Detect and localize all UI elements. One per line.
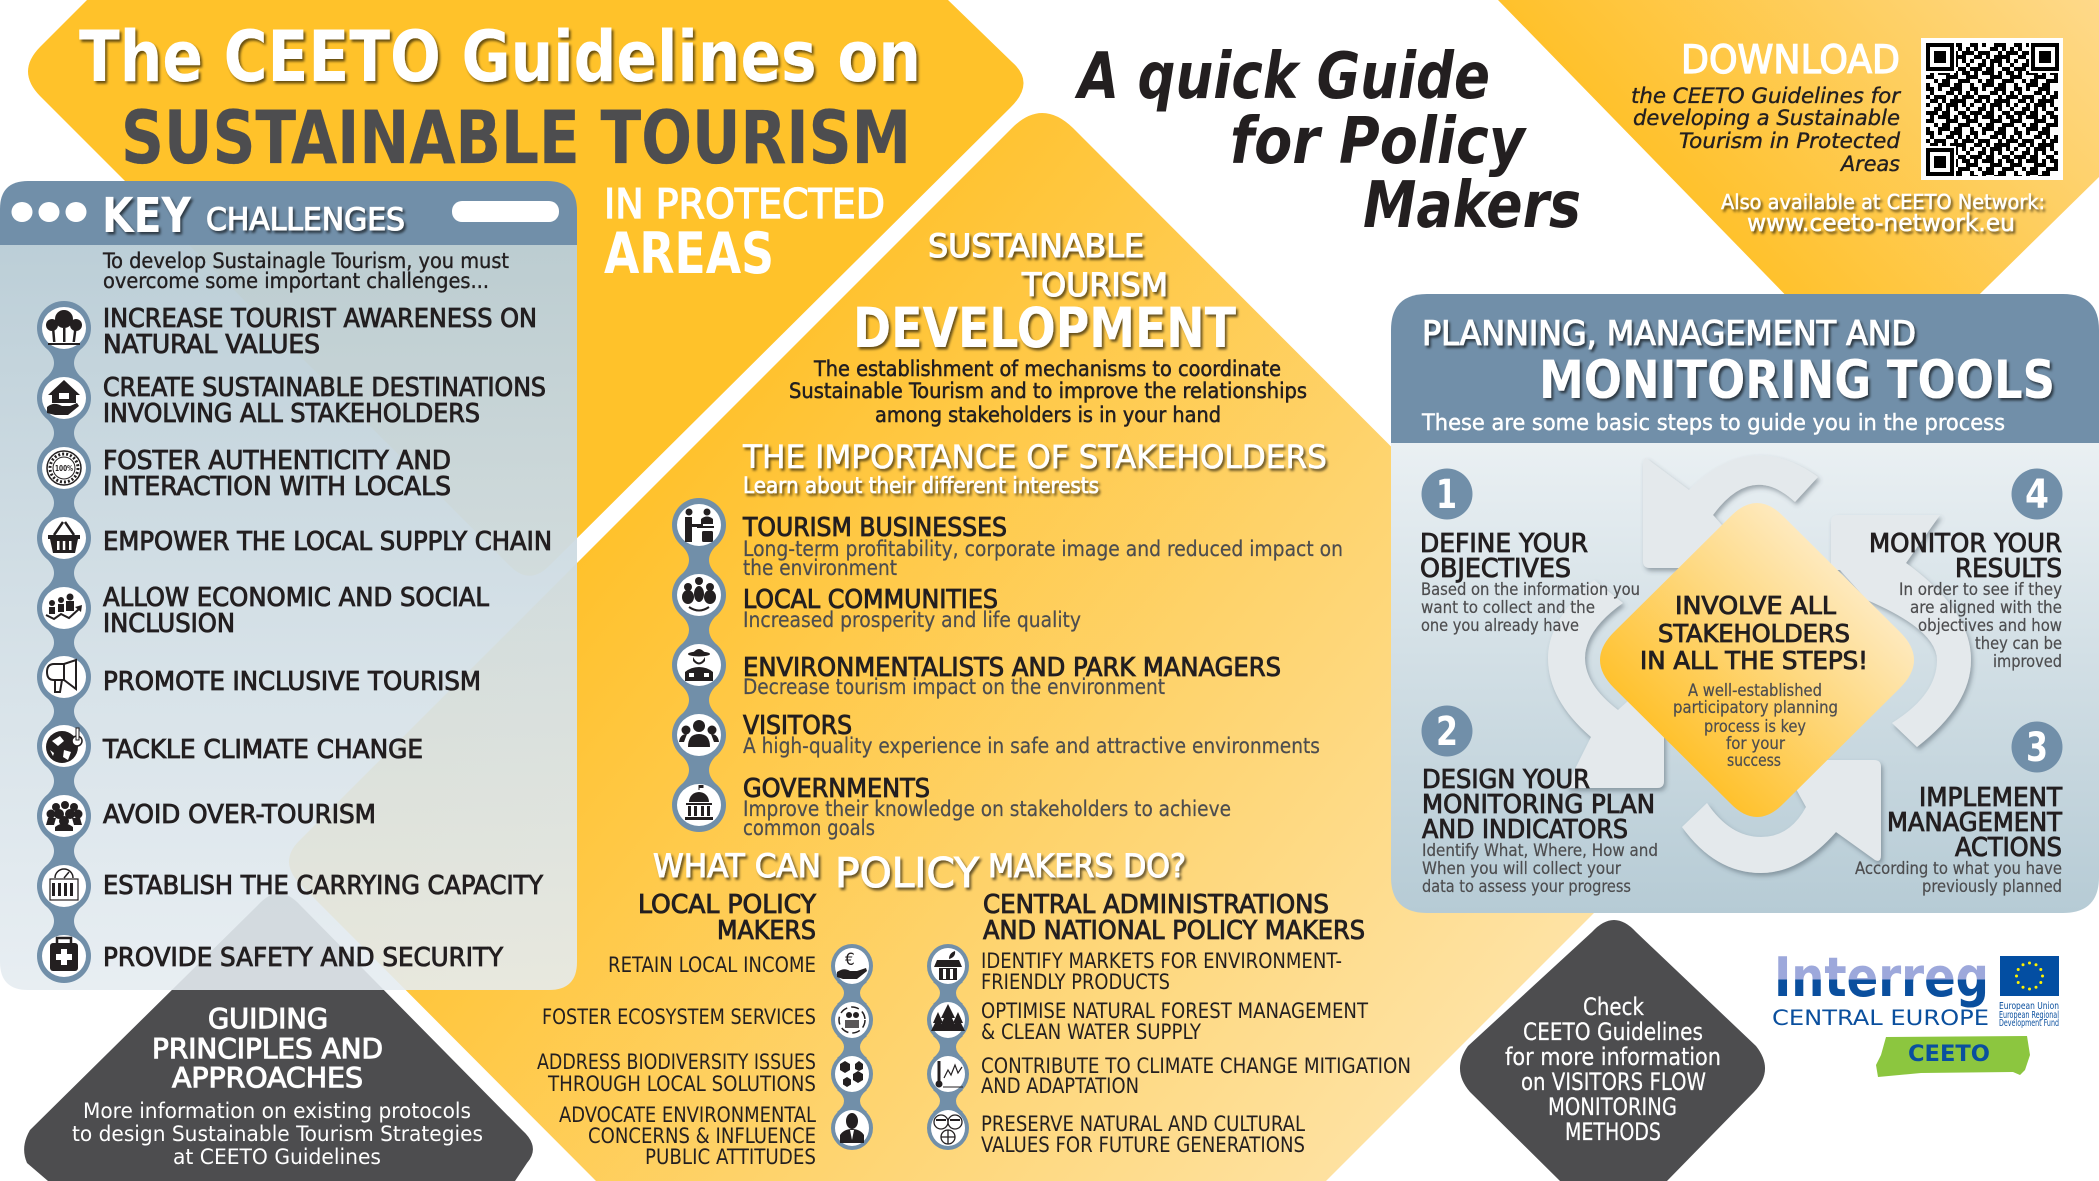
central diamond text: participatory planning xyxy=(1673,698,1838,718)
guiding principles text: APPROACHES xyxy=(172,1061,363,1094)
stakeholder: local communities xyxy=(743,585,1081,632)
check guidelines text: Check xyxy=(1583,993,1644,1021)
step 3: 3 xyxy=(2026,725,2048,771)
development description xyxy=(789,357,1307,427)
download description: the CEETO Guidelines for xyxy=(1631,84,1901,108)
title: The CEETO Guidelines on xyxy=(79,16,921,98)
step 1: want to collect and the xyxy=(1421,598,1595,618)
CEETO brush label xyxy=(1876,1036,2030,1077)
panel: check guidelines diamond background xyxy=(1460,920,1765,1181)
QR code xyxy=(1921,38,2063,180)
stakeholder: tourism businesses xyxy=(742,513,1343,580)
key challenges header xyxy=(0,181,577,245)
panel: download background xyxy=(1498,0,2099,392)
title xyxy=(79,16,921,287)
what can policy makers do heading xyxy=(653,847,1186,897)
local policy makers actions: ADVOCATE ENVIRONMENTAL xyxy=(559,1103,816,1127)
step 3: According to what you have xyxy=(1855,859,2062,879)
guiding principles text: GUIDING xyxy=(208,1002,328,1035)
central diamond text: for your xyxy=(1726,734,1786,754)
download block xyxy=(1631,38,2045,237)
central diamond text xyxy=(1673,681,1838,771)
EU flag xyxy=(2000,956,2059,996)
challenges list: FOSTER AUTHENTICITY AND xyxy=(103,446,451,476)
stakeholder: governments: GOVERNMENTS xyxy=(743,774,930,804)
development description: among stakeholders is in your hand xyxy=(875,403,1221,427)
step 2: DESIGN YOUR xyxy=(1422,765,1590,795)
planning panel header xyxy=(1391,294,2099,443)
key challenges header: KEY xyxy=(102,188,192,244)
local policy makers actions: ADDRESS BIODIVERSITY ISSUES xyxy=(537,1050,816,1074)
local policy makers actions xyxy=(537,953,816,1169)
central administrations actions: & CLEAN WATER SUPPLY xyxy=(981,1020,1201,1044)
local policy makers actions: RETAIN LOCAL INCOME xyxy=(608,953,816,977)
panel: key challenges xyxy=(0,181,577,990)
step 3 xyxy=(1855,722,2063,897)
icon: authenticity stamp xyxy=(47,451,81,485)
download description xyxy=(1631,84,1901,176)
local policy makers actions: PUBLIC ATTITUDES xyxy=(645,1145,816,1169)
icon: shopping basket xyxy=(48,522,80,553)
stakeholder: local communities: Increased prosperity and life quality xyxy=(743,608,1081,632)
challenges list: PROMOTE INCLUSIVE TOURISM xyxy=(103,667,481,697)
challenges list: NATURAL VALUES xyxy=(103,330,320,360)
key challenges intro: To develop Sustainagle Tourism, you must xyxy=(102,249,509,273)
check guidelines text: for more information xyxy=(1505,1043,1721,1071)
policy icon chains xyxy=(831,944,969,1150)
check guidelines text: on VISITORS FLOW xyxy=(1521,1068,1706,1096)
local policy makers heading: LOCAL POLICY xyxy=(638,890,817,920)
development heading: TOURISM xyxy=(1021,266,1168,304)
central administrations heading: AND NATIONAL POLICY MAKERS xyxy=(983,916,1365,946)
icon: people with rising arrow xyxy=(46,594,82,619)
development description: Sustainable Tourism and to improve the relationships xyxy=(789,379,1307,403)
icon: tourism businesses xyxy=(685,508,714,542)
challenges list: INCLUSION xyxy=(103,609,235,639)
challenges list: INCREASE TOURIST AWARENESS ON xyxy=(103,304,537,334)
development heading: DEVELOPMENT xyxy=(853,296,1236,360)
step 3: ACTIONS xyxy=(1955,833,2062,863)
stakeholder: visitors: A high-quality experience in safe and attractive environments xyxy=(743,734,1320,758)
step 1 xyxy=(1420,468,1640,636)
step 2: data to assess your progress xyxy=(1422,877,1631,897)
icon: euro in hand xyxy=(837,950,867,979)
stakeholder: tourism businesses: the environment xyxy=(743,556,897,580)
download block: DOWNLOAD xyxy=(1681,38,1900,83)
local policy makers column xyxy=(537,890,817,1169)
central administrations actions: OPTIMISE NATURAL FOREST MANAGEMENT xyxy=(981,999,1368,1023)
logo: Interreg Central Europe xyxy=(1772,946,2059,1077)
challenges list: PROVIDE SAFETY AND SECURITY xyxy=(103,943,504,973)
central diamond heading: INVOLVE ALL xyxy=(1675,591,1837,620)
step 1: 1 xyxy=(1436,472,1457,518)
icon: local communities xyxy=(682,577,716,610)
step 1: Based on the information you xyxy=(1421,580,1640,600)
step 3: IMPLEMENT xyxy=(1919,783,2063,813)
step 1: OBJECTIVES xyxy=(1420,554,1571,584)
title: IN PROTECTED xyxy=(604,180,885,228)
stakeholder: tourism businesses: TOURISM BUSINESSES xyxy=(742,513,1007,543)
development heading: SUSTAINABLE xyxy=(928,227,1144,265)
stakeholder: environmentalists and park managers: Decrease tourism impact on the environment xyxy=(743,675,1165,699)
what can policy makers do heading: MAKERS DO? xyxy=(988,847,1186,885)
challenges list: INTERACTION WITH LOCALS xyxy=(103,472,451,502)
check guidelines text xyxy=(1505,993,1721,1146)
central administrations column xyxy=(981,890,1411,1157)
stakeholders heading: Learn about their different interests xyxy=(743,474,1099,499)
icon: authenticity stamp: 100% xyxy=(55,464,73,473)
stakeholder: tourism businesses: Long-term profitability, corporate image and reduced impact on xyxy=(743,537,1343,561)
icon: house in hand xyxy=(47,380,80,415)
central diamond text: success xyxy=(1727,751,1781,771)
EU caption: European Union xyxy=(1999,1001,2059,1012)
step 4 xyxy=(1869,468,2062,672)
central diamond heading xyxy=(1640,591,1868,675)
challenges list xyxy=(102,304,552,973)
subtitle: a quick guide for policy makers: A quick Guide xyxy=(1074,40,1490,114)
challenges list: AVOID OVER-TOURISM xyxy=(103,800,376,830)
stakeholder: visitors xyxy=(743,711,1320,758)
central administrations heading xyxy=(983,890,1365,946)
availability note: Also available at CEETO Network: xyxy=(1721,190,2045,214)
central diamond heading: IN ALL THE STEPS! xyxy=(1640,646,1868,675)
step 3: previously planned xyxy=(1922,877,2062,897)
step 1: DEFINE YOUR xyxy=(1420,529,1588,559)
challenges list: ALLOW ECONOMIC AND SOCIAL xyxy=(103,583,489,613)
check guidelines text: CEETO Guidelines xyxy=(1523,1018,1703,1046)
step 3: MANAGEMENT xyxy=(1887,808,2063,838)
EU caption xyxy=(1999,1001,2059,1029)
logo: Interreg Central Europe: CENTRAL EUROPE xyxy=(1772,1006,1989,1030)
step 2: AND INDICATORS xyxy=(1422,815,1628,845)
subtitle: a quick guide for policy makers: for Policy xyxy=(1230,105,1527,179)
panel: guiding principles background xyxy=(24,894,533,1181)
download description: developing a Sustainable xyxy=(1633,106,1900,130)
development description: The establishment of mechanisms to coordinate xyxy=(813,357,1281,381)
stakeholders list xyxy=(742,513,1343,840)
local policy makers heading xyxy=(638,890,817,946)
development heading xyxy=(853,227,1236,360)
step 4: improved xyxy=(1993,652,2062,672)
stakeholder: governments: common goals xyxy=(743,816,875,840)
central diamond heading: STAKEHOLDERS xyxy=(1658,619,1850,648)
guiding principles text: PRINCIPLES AND xyxy=(152,1032,383,1065)
icon: forest xyxy=(931,1004,965,1031)
icon: megaphone xyxy=(47,660,76,692)
local policy makers actions: CONCERNS & INFLUENCE xyxy=(588,1124,816,1148)
check guidelines text: MONITORING xyxy=(1548,1093,1677,1121)
what can policy makers do heading: WHAT CAN xyxy=(653,847,821,885)
step 1: one you already have xyxy=(1421,616,1579,636)
guiding principles text: at CEETO Guidelines xyxy=(173,1145,381,1169)
key challenges intro xyxy=(102,249,509,293)
stakeholders heading: THE IMPORTANCE OF STAKEHOLDERS xyxy=(742,438,1327,476)
challenges list: CREATE SUSTAINABLE DESTINATIONS xyxy=(103,373,546,403)
planning panel header: These are some basic steps to guide you in the process xyxy=(1421,411,2005,436)
icon: two faces and globe xyxy=(934,1115,962,1144)
icon: climate chart xyxy=(936,1061,963,1087)
step 4: MONITOR YOUR xyxy=(1869,529,2062,559)
panel: sustainable tourism development background xyxy=(289,113,1713,1181)
step 2 xyxy=(1422,706,1658,897)
central administrations actions: VALUES FOR FUTURE GENERATIONS xyxy=(981,1133,1305,1157)
icon: carrying capacity gauge xyxy=(50,869,78,900)
icon: visitors xyxy=(679,720,719,747)
key challenges header: CHALLENGES xyxy=(206,202,405,238)
logo: Interreg Central Europe: Interreg xyxy=(1774,946,1989,1009)
icon: ecosystem cycle xyxy=(839,1007,865,1033)
local policy makers actions: FOSTER ECOSYSTEM SERVICES xyxy=(542,1005,816,1029)
step 4: In order to see if they xyxy=(1899,580,2062,600)
key challenges intro: overcome some important challenges... xyxy=(103,269,489,293)
subtitle: a quick guide for policy makers xyxy=(1074,40,1581,243)
central administrations actions: PRESERVE NATURAL AND CULTURAL xyxy=(981,1112,1305,1136)
stakeholder: governments xyxy=(743,774,1231,840)
EU caption: European Regional xyxy=(1999,1010,2059,1021)
step 4: RESULTS xyxy=(1955,554,2062,584)
cycle arrows xyxy=(1548,455,1971,873)
icon: crowd xyxy=(46,801,82,831)
stakeholder: visitors: VISITORS xyxy=(743,711,852,741)
local policy makers heading: MAKERS xyxy=(717,916,816,946)
stakeholder: governments: Improve their knowledge on stakeholders to achieve xyxy=(743,797,1231,821)
challenges list: TACKLE CLIMATE CHANGE xyxy=(102,735,423,765)
stakeholder: environmentalists and park managers: ENVIRONMENTALISTS AND PARK MANAGERS xyxy=(743,653,1281,683)
step 4: are aligned with the xyxy=(1910,598,2062,618)
what can policy makers do heading: POLICY xyxy=(835,849,980,897)
icon: biodiversity hexagons xyxy=(840,1061,863,1087)
step 4: they can be xyxy=(1975,634,2062,654)
step 2: MONITORING PLAN xyxy=(1422,790,1655,820)
guiding principles text: to design Sustainable Tourism Strategies xyxy=(72,1122,483,1146)
central administrations actions xyxy=(981,949,1411,1157)
stakeholder: environmentalists and park managers xyxy=(743,653,1281,699)
central administrations actions: AND ADAPTATION xyxy=(981,1074,1139,1098)
icon: government building xyxy=(685,785,713,820)
icon: globe and thermometer xyxy=(46,728,82,763)
panel: planning, management and monitoring tools xyxy=(1391,294,2099,913)
challenges list: INVOLVING ALL STAKEHOLDERS xyxy=(103,399,480,429)
availability note xyxy=(1721,190,2045,237)
challenge icon chain xyxy=(37,301,91,983)
title: SUSTAINABLE TOURISM xyxy=(121,96,911,181)
EU caption: Development Fund xyxy=(1999,1018,2059,1029)
check guidelines text: METHODS xyxy=(1565,1118,1661,1146)
icon: park ranger xyxy=(685,649,713,681)
central diamond text: A well-established xyxy=(1688,681,1822,701)
central diamond xyxy=(1600,503,1914,817)
central administrations actions: IDENTIFY MARKETS FOR ENVIRONMENT- xyxy=(981,949,1342,973)
planning panel header: MONITORING TOOLS xyxy=(1539,350,2055,411)
icon: first aid kit xyxy=(50,938,78,971)
local policy makers actions: THROUGH LOCAL SOLUTIONS xyxy=(547,1072,816,1096)
icon: euro in hand: € xyxy=(845,950,855,970)
download description: Tourism in Protected xyxy=(1679,129,1901,153)
step 4: objectives and how xyxy=(1918,616,2062,636)
central diamond text: process is key xyxy=(1704,717,1806,737)
challenges list: ESTABLISH THE CARRYING CAPACITY xyxy=(103,871,544,901)
icon: trees xyxy=(46,310,82,345)
icon: market stall xyxy=(934,951,962,980)
challenges list: EMPOWER THE LOCAL SUPPLY CHAIN xyxy=(103,527,552,557)
central administrations heading: CENTRAL ADMINISTRATIONS xyxy=(983,890,1329,920)
step 2: Identify What, Where, How and xyxy=(1422,841,1658,861)
stakeholders heading xyxy=(742,438,1327,499)
stakeholder: local communities: LOCAL COMMUNITIES xyxy=(743,585,998,615)
guiding principles text: More information on existing protocols xyxy=(83,1099,471,1123)
download description: Areas xyxy=(1840,152,1900,176)
availability note: www.ceeto-network.eu xyxy=(1747,209,2015,237)
guiding principles text xyxy=(72,1002,483,1169)
subtitle: a quick guide for policy makers: Makers xyxy=(1363,169,1581,243)
step 2: When you will collect your xyxy=(1422,859,1622,879)
step 4: 4 xyxy=(2025,472,2049,518)
central administrations actions: FRIENDLY PRODUCTS xyxy=(981,970,1170,994)
planning panel header: PLANNING, MANAGEMENT AND xyxy=(1422,314,1916,354)
icon: person in suit xyxy=(840,1113,864,1143)
step 2: 2 xyxy=(1436,709,1458,755)
panel: title hexagon background xyxy=(28,0,1024,576)
title: AREAS xyxy=(604,221,774,287)
stakeholder icon chain xyxy=(672,498,726,832)
CEETO brush label: CEETO xyxy=(1908,1042,1990,1067)
central administrations actions: CONTRIBUTE TO CLIMATE CHANGE MITIGATION xyxy=(981,1054,1411,1078)
